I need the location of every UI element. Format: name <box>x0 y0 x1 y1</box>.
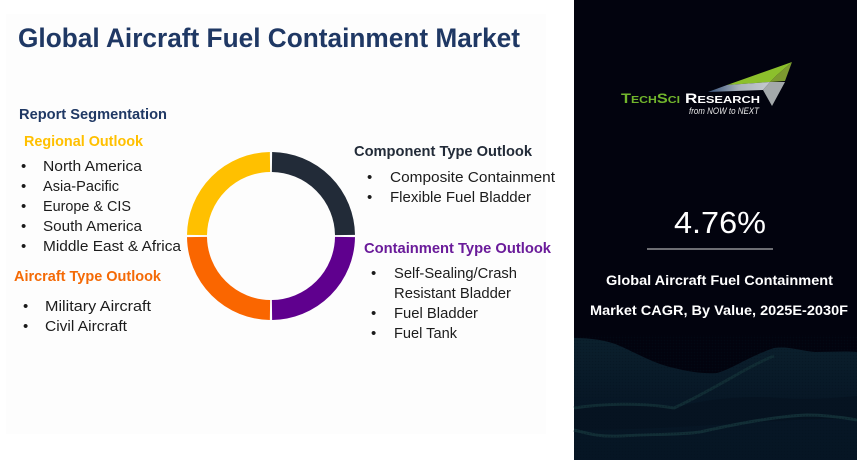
list: regions: Europe & CIS <box>43 198 131 215</box>
panel: aircraft type outlook <box>14 268 162 335</box>
segment: aircraft type <box>197 237 270 310</box>
list: containment types <box>371 265 517 342</box>
list: regions: Asia-Pacific <box>43 178 119 195</box>
panel: component type outlook <box>354 143 556 206</box>
list: component types: • <box>367 169 372 186</box>
list: regions: • <box>21 238 26 255</box>
logo tagline: from NOW to NEXT <box>689 106 760 116</box>
panel: containment type outlook <box>364 240 552 342</box>
stat caption: Global Aircraft Fuel Containment <box>606 272 833 288</box>
logo: TechSci Research: RESEARCH <box>685 90 760 106</box>
list: containment types: • <box>371 325 376 342</box>
icon: logo arrow <box>708 62 792 106</box>
panel: regional outlook <box>21 133 182 255</box>
list: containment types: • <box>371 265 376 282</box>
title: Global Aircraft Fuel Containment Market <box>18 23 520 53</box>
panel: dark sidebar <box>574 0 857 460</box>
stat: CAGR value: 4.76% <box>674 205 766 240</box>
heading: component type outlook: Component Type Outlook <box>354 143 533 160</box>
logo wordmark: TECH SCI <box>621 90 680 106</box>
heading: regional outlook: Regional Outlook <box>24 133 144 150</box>
list: aircraft types <box>23 298 152 335</box>
graphic: data waves <box>574 335 857 460</box>
list: regions: Middle East & Africa <box>43 238 182 255</box>
list: regions: • <box>21 198 26 215</box>
list: regions: • <box>21 218 26 235</box>
list: regions: North America <box>43 158 143 175</box>
list: aircraft types: Military Aircraft <box>45 298 152 315</box>
stat caption: Market CAGR, By Value, 2025E-2030F <box>590 302 848 318</box>
segment: regional <box>197 162 270 235</box>
list: regions: South America <box>43 218 143 235</box>
list: containment types: • <box>371 305 376 322</box>
list: aircraft types: • <box>23 298 28 315</box>
heading: aircraft type outlook: Aircraft Type Outlook <box>14 268 162 285</box>
logo: TechSci Research <box>621 62 792 116</box>
stat caption <box>590 272 848 318</box>
list: containment types: Self-Sealing/Crash <box>394 265 517 282</box>
list: component types: • <box>367 189 372 206</box>
panel: left background <box>0 0 574 460</box>
chart: segmentation donut <box>197 162 345 310</box>
segment: containment <box>272 237 345 310</box>
list: containment types: Resistant Bladder <box>394 285 511 302</box>
list: aircraft types: Civil Aircraft <box>45 318 128 335</box>
list: component types: Composite Containment <box>390 169 556 186</box>
list: regions: • <box>21 158 26 175</box>
list: component types: Flexible Fuel Bladder <box>390 189 531 206</box>
heading: containment type outlook: Containment Type Outlook <box>364 240 552 257</box>
list: regions <box>21 158 182 255</box>
segment: component <box>272 162 345 235</box>
heading: report segmentation: Report Segmentation <box>19 106 167 123</box>
panel: soft content background <box>6 14 546 434</box>
list: component types <box>367 169 556 206</box>
list: aircraft types: • <box>23 318 28 335</box>
list: regions: • <box>21 178 26 195</box>
divider under value <box>647 248 773 250</box>
list: containment types: Fuel Bladder <box>394 305 478 322</box>
list: containment types: Fuel Tank <box>394 325 457 342</box>
